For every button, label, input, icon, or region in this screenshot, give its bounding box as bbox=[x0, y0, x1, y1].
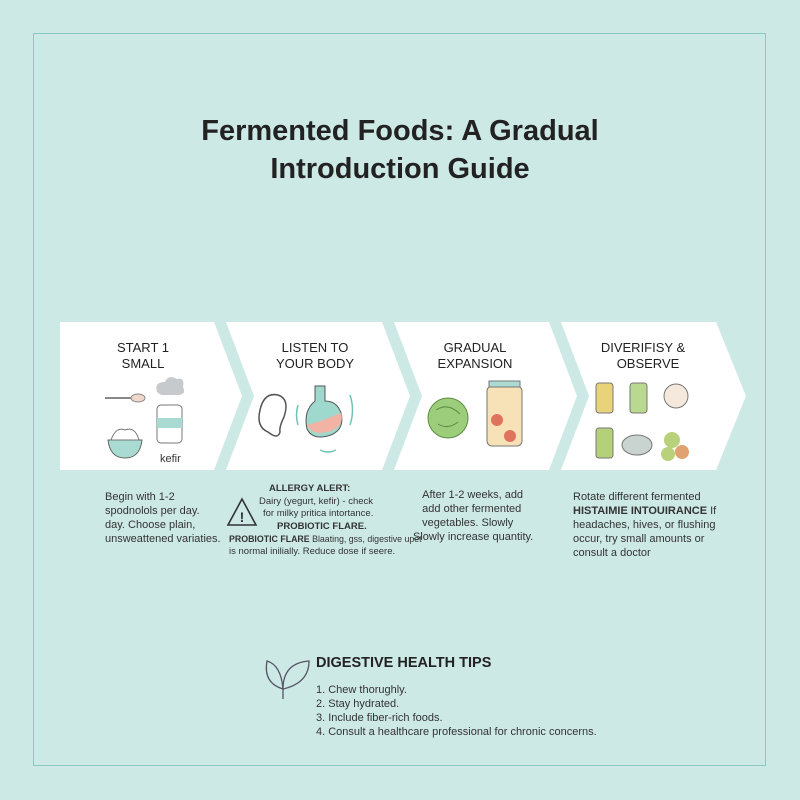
chevron 3: gradual expansion: EXPANSION bbox=[438, 356, 512, 371]
text: step 3: After 1-2 weeks, add bbox=[422, 489, 523, 501]
chevron 1: start small: kefir bbox=[160, 453, 181, 465]
chevron 4: diversify & observe: OBSERVE bbox=[617, 356, 680, 371]
text: step 2: PROBIOTIC FLARE Blaating, gss, digestive upet bbox=[229, 534, 422, 544]
text: step 2: ALLERGY ALERT: bbox=[269, 483, 350, 494]
text: step 4 bbox=[573, 491, 716, 559]
icon: leaf bbox=[266, 661, 309, 699]
text: step 2 bbox=[229, 483, 422, 556]
text: step 2: Dairy (yegurt, kefir) - check bbox=[259, 496, 373, 506]
icon: warning triangle bbox=[228, 499, 256, 525]
tips list: 3. Include fiber-rich foods. bbox=[316, 712, 443, 724]
chevron 1: start small bbox=[60, 322, 242, 470]
chevron 4: diversify & observe bbox=[561, 322, 746, 470]
chevron 3: gradual expansion bbox=[394, 322, 577, 470]
title: Fermented Foods: A Gradual bbox=[201, 115, 599, 147]
text: step 1: day. Choose plain, bbox=[105, 519, 195, 531]
tips list: 4. Consult a healthcare professional for chronic concerns. bbox=[316, 726, 597, 738]
tips panel bbox=[316, 655, 597, 738]
title bbox=[201, 115, 599, 185]
chevron 1: start small: START 1 bbox=[117, 340, 169, 355]
chevron 2: listen to your body: LISTEN TO bbox=[282, 340, 348, 355]
text: step 1: Begin with 1-2 bbox=[105, 491, 175, 503]
text: step 1: unsweattened variaties. bbox=[105, 533, 221, 545]
text: step 3: Slowly increase quantity. bbox=[413, 531, 533, 543]
text: step 4: HISTAIMIE INTOUIRANCE If bbox=[573, 505, 716, 517]
tips list bbox=[316, 684, 597, 738]
text: step 1: spodnolols per day. bbox=[105, 505, 200, 517]
text: step 2: is normal inilially. Reduce dose if seere. bbox=[229, 546, 395, 556]
text: step 4: Rotate different fermented bbox=[573, 491, 701, 503]
tips heading: DIGESTIVE HEALTH TIPS bbox=[316, 655, 491, 671]
chevron 1: start small: SMALL bbox=[122, 356, 164, 371]
text: step 3 bbox=[413, 489, 533, 543]
text: step 2: for milkу pritica intortance. bbox=[263, 508, 373, 519]
text: step 2: PROBIOTIC FLARE. bbox=[277, 520, 367, 532]
text: step 4: headaches, hives, or flushing bbox=[573, 519, 715, 531]
chevron 4: diversify & observe: DIVERIFISY & bbox=[601, 340, 685, 355]
title: Introduction Guide bbox=[270, 153, 530, 185]
chevron 3: gradual expansion: GRADUAL bbox=[444, 340, 506, 355]
text: step 3: add other fermented bbox=[422, 503, 521, 515]
text: step 4: consult a doctor bbox=[573, 547, 651, 559]
text: step 1 bbox=[105, 491, 221, 545]
chevron 2: listen to your body: YOUR BODY bbox=[276, 356, 354, 371]
chevron 2: listen to your body bbox=[226, 322, 410, 470]
tips list: 1. Chew thorughly. bbox=[316, 684, 407, 696]
text: step 3: vegetables. Slowly bbox=[422, 517, 513, 529]
tips list: 2. Stay hydrated. bbox=[316, 698, 399, 710]
icon: warning triangle: ! bbox=[240, 509, 244, 525]
text: step 4: occur, try small amounts or bbox=[573, 533, 704, 545]
